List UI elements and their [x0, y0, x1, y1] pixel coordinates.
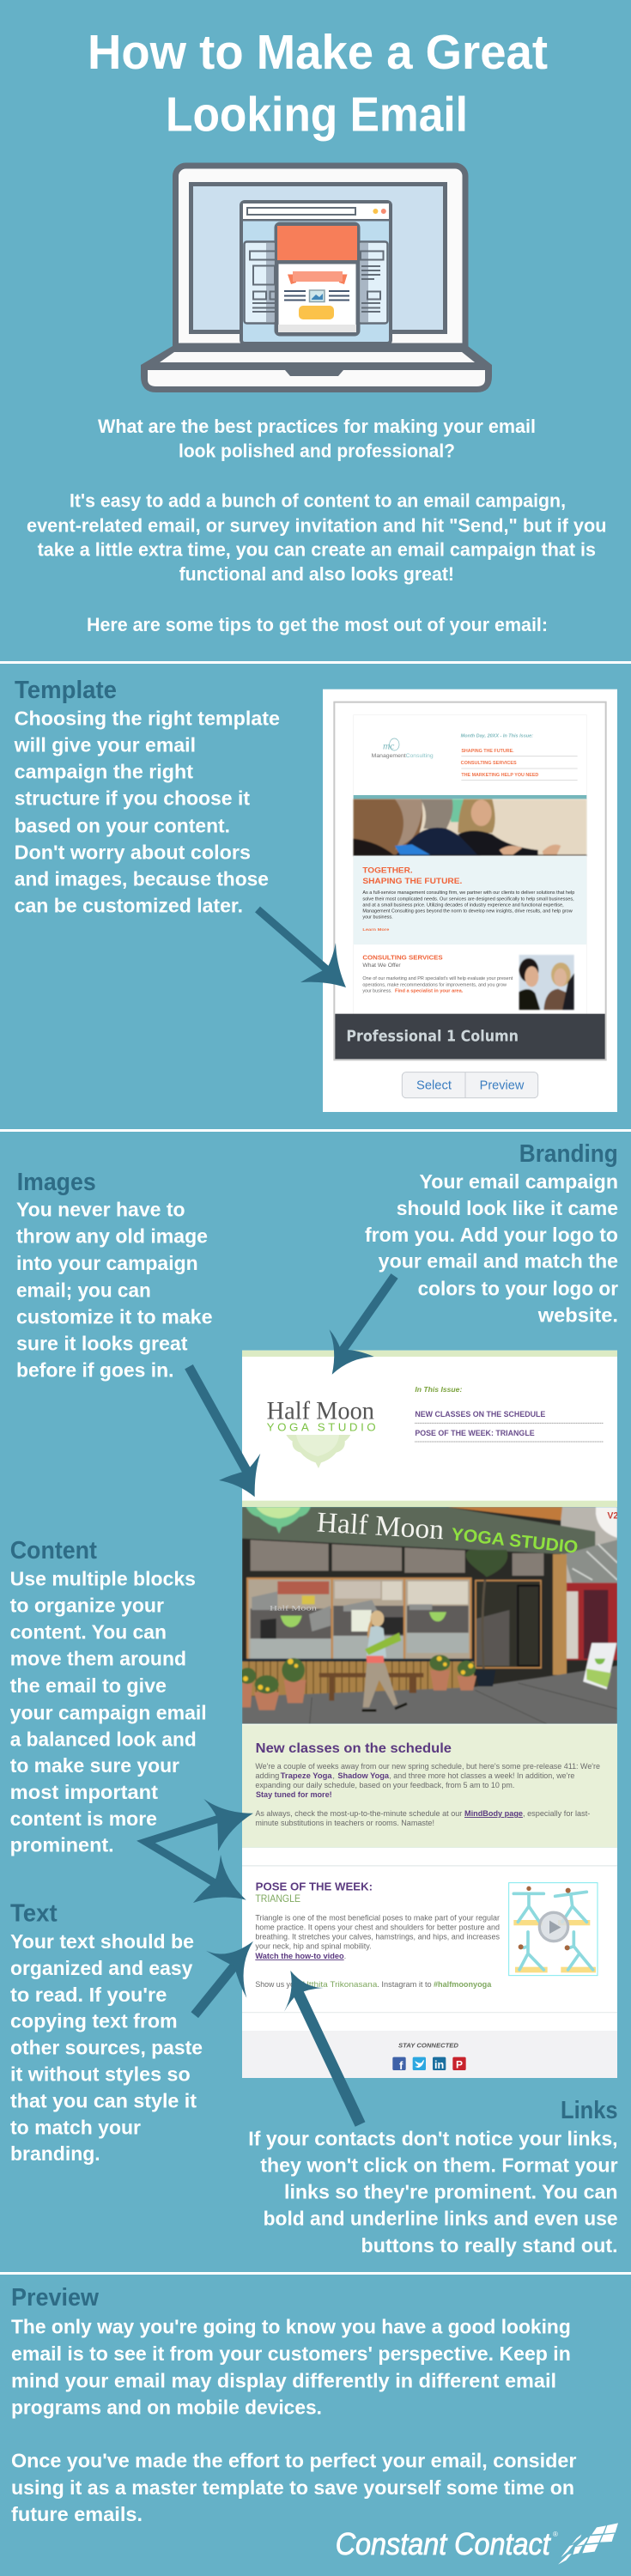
text block: content: move them around — [10, 1648, 186, 1670]
article: new classes: As always, check the most-up-to-the-minute schedule at our — [255, 1809, 462, 1818]
text block: template: based on your content. — [15, 814, 230, 836]
photo: yoga studio storefront: Half Moon — [316, 1506, 445, 1546]
article: new classes: Stay tuned for more! — [256, 1790, 332, 1799]
image: triangle pose video — [509, 1883, 598, 1976]
article: new classes: We're a couple of weeks away from our new spring schedule, but here's some pre-release 411: We're — [255, 1762, 600, 1771]
photo: meeting — [354, 799, 586, 856]
panel: yoga studio email — [239, 1351, 618, 2078]
text block: preview: programs and on mobile devices. — [11, 2396, 322, 2418]
text block: template — [14, 707, 280, 917]
article: together — [362, 866, 574, 933]
text block: text: organized and easy — [10, 1957, 192, 1979]
template name bar — [335, 1014, 605, 1059]
text block: preview: email is to see it from your customers' perspective. Keep in — [11, 2342, 571, 2365]
heading: Links: Links — [561, 2097, 618, 2124]
article: pose of the week: breathing. It stretches your calves, hamstrings, and hips, and increases — [255, 1933, 500, 1941]
issue list: THE MARKETING HELP YOU NEED — [461, 773, 538, 778]
text block: branding — [365, 1170, 618, 1326]
article: together: As a full-service management consulting firm, we partner with our clients to deliver solutions that help — [362, 890, 574, 896]
intro text: look polished and professional? — [179, 440, 455, 462]
logo: Management Consulting: Consulting — [406, 753, 434, 759]
article: new classes: expanding our daily schedule, based on your feedback, from 5 am to 10 pm. — [255, 1781, 514, 1789]
text block: content: most important — [10, 1781, 158, 1803]
text block: images: before if goes in. — [16, 1358, 173, 1381]
intro text: functional and also looks great! — [179, 563, 454, 585]
article: consulting services: What We Offer — [362, 963, 401, 969]
photo: yoga studio storefront: Half Moon — [270, 1604, 318, 1613]
text block: template: Choosing the right template — [15, 707, 280, 729]
issue list: In This Issue: — [415, 1385, 463, 1394]
title: How to Make a Great — [88, 25, 548, 80]
article: together: SHAPING THE FUTURE. — [362, 877, 462, 885]
buttons: select and preview — [402, 1072, 538, 1098]
arrow: branding — [330, 1276, 395, 1375]
logo: Constant Contact: Constant Contact — [336, 2526, 551, 2561]
article: together: solve their most complicated needs. Our services are designed specifically to help small businesses, — [362, 896, 574, 902]
heading: Preview: Preview — [11, 2284, 99, 2312]
text block: links: bold and underline links and even use — [264, 2207, 618, 2229]
text block: links: links so they're prominent. You can — [284, 2180, 618, 2202]
text block: text — [10, 1930, 203, 2165]
logo: Half Moon Yoga Studio: YOGA STUDIO — [267, 1421, 376, 1434]
intro text: event-related email, or survey invitation and hit "Send," but if you — [27, 514, 606, 536]
article: together: Learn More — [362, 927, 390, 933]
article: pose of the week: . Instagram it to — [377, 1980, 432, 1989]
text block: images: into your campaign — [16, 1252, 198, 1274]
icon: linkedin: in — [434, 2059, 444, 2071]
text block: content — [10, 1568, 207, 1856]
heading: Template: Template — [15, 677, 117, 704]
arrow: text — [195, 1941, 253, 2015]
text block: text: that you can style it — [10, 2089, 197, 2111]
logo: Constant Contact: ® — [553, 2530, 558, 2538]
article: new classes: Shadow Yoga — [337, 1771, 390, 1780]
text block: branding: your email and match the — [379, 1250, 618, 1273]
article: new classes: , — [332, 1771, 335, 1780]
article: pose of the week: TRIANGLE — [255, 1893, 300, 1905]
article: consulting services: One of our marketing and PR specialist's will help evaluate your present — [362, 976, 513, 981]
footer: stay connected — [242, 2031, 617, 2078]
text block: preview: future emails. — [11, 2503, 143, 2525]
text block: content: a balanced look and — [10, 1728, 197, 1750]
icon: pinterest: P — [456, 2058, 463, 2070]
article: consulting services: CONSULTING SERVICES — [362, 953, 443, 961]
text block: preview: using it as a master template to save yourself some time on — [11, 2476, 574, 2499]
text block: branding: should look like it came — [397, 1197, 618, 1219]
arrow: images — [189, 1367, 260, 1497]
heading: Text: Text — [10, 1900, 58, 1928]
photo: yoga studio storefront: V2 — [607, 1510, 618, 1521]
email header — [242, 1351, 617, 1507]
text block: template: structure if you choose it — [15, 787, 250, 810]
icon: twitter — [413, 2057, 426, 2070]
title: Looking Email — [166, 88, 468, 143]
text block: text: Your text should be — [10, 1930, 194, 1953]
intro text: What are the best practices for making your email — [98, 416, 536, 437]
text block: template: campaign the right — [15, 761, 193, 783]
logo: Half Moon Yoga Studio: Half Moon — [267, 1397, 374, 1425]
photo: yoga studio storefront — [239, 1506, 618, 1724]
article: new classes — [242, 1724, 617, 1848]
article: pose of the week: home practice. It opens your chest and shoulders for better posture and — [255, 1923, 500, 1932]
text block: preview: mind your email may display differently in different email — [11, 2369, 556, 2391]
text block: branding: colors to your logo or — [418, 1277, 618, 1299]
article: new classes: New classes on the schedule — [256, 1741, 452, 1756]
article: new classes: adding — [255, 1771, 279, 1780]
buttons: select and preview: Select — [416, 1078, 452, 1092]
arrow: template — [258, 909, 346, 987]
article: new classes: Trapeze Yoga — [281, 1771, 332, 1780]
heading: Branding: Branding — [519, 1140, 618, 1168]
heading: Content: Content — [10, 1537, 97, 1564]
icon: linkedin — [433, 2057, 446, 2071]
article: new classes: , and three more hot classes a week! In addition, we're — [389, 1771, 574, 1780]
text block: branding: Your email campaign — [419, 1170, 618, 1193]
icon: laptop with email layouts — [141, 166, 492, 392]
article: pose of the week — [242, 1848, 617, 2031]
text block: content: content is more — [10, 1807, 157, 1830]
text block: links — [248, 2127, 618, 2257]
text block: links: If your contacts don't notice your links, — [248, 2127, 618, 2149]
text block: text: other sources, paste — [10, 2037, 203, 2059]
text block: text: to match your — [10, 2116, 141, 2138]
article: pose of the week: Watch the how-to video — [255, 1952, 344, 1960]
text block: text: copying text from — [10, 2010, 178, 2032]
issue list: NEW CLASSES ON THE SCHEDULE — [415, 1410, 545, 1419]
text block: images: customize it to make — [16, 1306, 213, 1328]
intro text: Here are some tips to get the most out of your email: — [87, 614, 548, 635]
issue list: CONSULTING SERVICES — [461, 761, 517, 766]
text block: content: prominent. — [10, 1834, 114, 1856]
article: together: your business. — [362, 915, 393, 920]
photo: two women — [519, 955, 574, 1010]
text block: preview: The only way you're going to know you have a good looking — [11, 2316, 571, 2338]
text block: content: Use multiple blocks — [10, 1568, 196, 1590]
article: new classes: , especially for last- — [523, 1809, 590, 1818]
text block: links: they won't click on them. Format your — [260, 2154, 618, 2176]
logo: Management Consulting: Management — [372, 753, 406, 759]
text block: content: the email to give — [10, 1674, 167, 1697]
article: consulting services: your business. — [362, 988, 392, 993]
heading: Images: Images — [17, 1169, 96, 1196]
issue list — [461, 733, 578, 781]
text block: content: your campaign email — [10, 1701, 207, 1723]
text block: preview — [11, 2316, 576, 2525]
article: pose of the week: your neck, hip and spinal mobility. — [255, 1942, 372, 1951]
issue list — [415, 1385, 604, 1442]
text block: images: You never have to — [16, 1199, 185, 1221]
text block: text: branding. — [10, 2142, 100, 2165]
text block: branding: from you. Add your logo to — [365, 1224, 618, 1246]
buttons: select and preview: Preview — [480, 1078, 525, 1092]
photo: yoga studio storefront: YOGA STUDIO — [450, 1524, 579, 1558]
article: pose of the week: #halfmoonyoga — [434, 1980, 492, 1989]
text block: images — [16, 1199, 213, 1381]
article: pose of the week: Triangle is one of the most beneficial poses to make part of your regular — [255, 1914, 500, 1923]
text block: template: will give your email — [14, 734, 196, 756]
article: consulting services: Find a specialist in your area. — [395, 988, 464, 993]
arrow: content pair — [146, 1799, 253, 1903]
issue list: SHAPING THE FUTURE. — [461, 749, 514, 754]
icon: facebook: f — [399, 2059, 403, 2072]
text block: images: email; you can — [16, 1279, 151, 1302]
arrow: links — [284, 1971, 361, 2124]
article: new classes: MindBody page — [464, 1809, 523, 1818]
logo: Half Moon Yoga Studio — [267, 1397, 376, 1468]
text block: template: can be customized later. — [15, 895, 243, 917]
logo: Management Consulting: mc — [383, 740, 395, 752]
issue list: POSE OF THE WEEK: TRIANGLE — [415, 1429, 535, 1437]
template name bar: Professional 1 Column — [346, 1028, 519, 1046]
text block: images: sure it looks great — [16, 1333, 188, 1355]
article: new classes: minute substitutions in teachers or rooms. Namaste! — [255, 1819, 434, 1827]
intro text — [27, 416, 606, 635]
logo: Management Consulting — [372, 738, 434, 759]
article: consulting services — [362, 953, 513, 993]
article: together: TOGETHER. — [362, 866, 413, 875]
text block: content: to organize your — [10, 1595, 164, 1617]
text block: links: buttons to really stand out. — [361, 2234, 618, 2257]
text block: branding: website. — [537, 1303, 618, 1326]
text block: template: Don't worry about colors — [15, 841, 251, 864]
text block: template: and images, because those — [15, 868, 269, 890]
panel: template preview card — [323, 690, 617, 1112]
text block: images: throw any old image — [16, 1225, 208, 1248]
title — [88, 25, 548, 143]
article: pose of the week: Utthita Trikonasana — [303, 1980, 378, 1989]
text block: text: it without styles so — [10, 2063, 191, 2085]
article: together: Management Consulting goes beyond the norm to develop new insights, drive results, and help grow — [362, 909, 573, 914]
icon: facebook — [392, 2057, 406, 2072]
intro text: take a little extra time, you can create an email campaign that is — [38, 539, 596, 561]
issue list: Month Day, 20XX - In This Issue: — [461, 733, 533, 738]
article: pose of the week: Show us your — [255, 1980, 301, 1989]
article: together: and at a small business price. Utilizing decades of industry experience and functional expertise, — [362, 902, 564, 908]
footer: stay connected: STAY CONNECTED — [398, 2042, 459, 2050]
text block: text: to read. If you're — [10, 1984, 167, 2006]
article: consulting services: operations, make recommendations for improvements, and you grow — [362, 982, 507, 987]
text block: content: content. You can — [10, 1621, 167, 1643]
icon: pinterest — [452, 2057, 466, 2070]
text block: preview: Once you've made the effort to perfect your email, consider — [11, 2449, 576, 2471]
article: pose of the week: . — [344, 1952, 346, 1960]
text block: content: to make sure your — [10, 1754, 179, 1777]
article: pose of the week: POSE OF THE WEEK: — [256, 1880, 373, 1893]
intro text: It's easy to add a bunch of content to an email campaign, — [70, 490, 566, 512]
